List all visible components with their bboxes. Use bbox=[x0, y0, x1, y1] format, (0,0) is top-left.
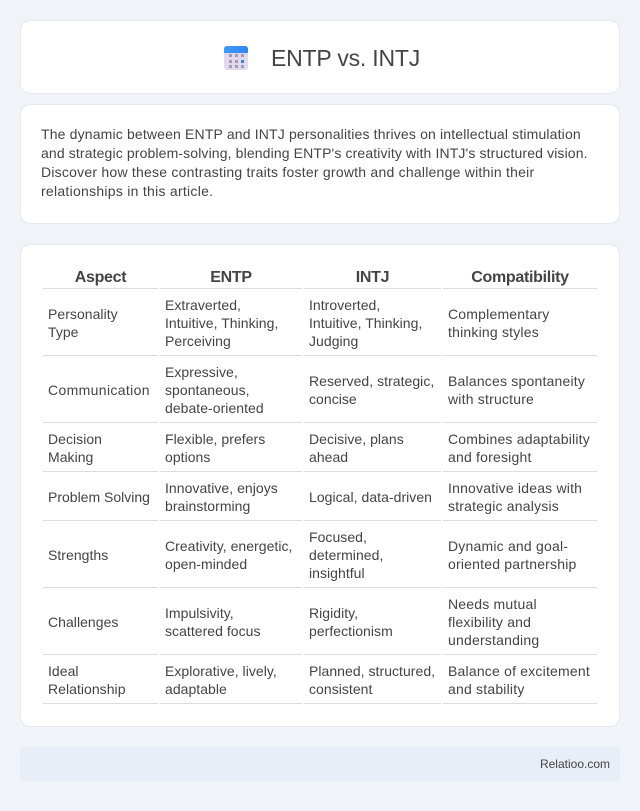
row: Strengths: determined, bbox=[309, 547, 383, 563]
row: Communication: Reserved, strategic, bbox=[309, 373, 434, 389]
row: Ideal Relationship bbox=[43, 663, 597, 704]
row: Decision Making bbox=[43, 431, 597, 472]
row: Communication: debate-oriented bbox=[165, 400, 264, 416]
row: Problem Solving bbox=[43, 480, 597, 521]
row: Communication: concise bbox=[309, 391, 357, 407]
intro text bbox=[41, 126, 588, 199]
icon: calendar bbox=[224, 46, 248, 70]
row: Personality Type: Complementary bbox=[448, 306, 549, 322]
intro card bbox=[20, 104, 620, 224]
row: Personality Type: Judging bbox=[309, 333, 358, 349]
table header bbox=[43, 269, 597, 289]
row: Challenges: scattered focus bbox=[165, 623, 261, 639]
row: Decision Making: options bbox=[165, 449, 210, 465]
row: Strengths: Creativity, energetic, bbox=[165, 538, 292, 554]
row: Personality Type: Type bbox=[48, 324, 79, 340]
row: Ideal Relationship: Planned, structured, bbox=[309, 663, 435, 679]
row: Personality Type bbox=[43, 297, 597, 356]
row: Communication: with structure bbox=[448, 391, 534, 407]
row: Challenges: flexibility and bbox=[448, 614, 531, 630]
row: Strengths: oriented partnership bbox=[448, 556, 577, 572]
row: Challenges: perfectionism bbox=[309, 623, 393, 639]
row: Decision Making: and foresight bbox=[448, 449, 532, 465]
row: Problem Solving: Problem Solving bbox=[48, 489, 150, 505]
row: Challenges: Rigidity, bbox=[309, 605, 358, 621]
row: Ideal Relationship: Explorative, lively, bbox=[165, 663, 277, 679]
table header: Compatibility bbox=[471, 269, 569, 286]
row: Strengths: Strengths bbox=[48, 547, 108, 563]
row: Challenges bbox=[43, 596, 597, 655]
row: Decision Making: Decisive, plans bbox=[309, 431, 404, 447]
row: Challenges: Needs mutual bbox=[448, 596, 537, 612]
row: Decision Making: ahead bbox=[309, 449, 348, 465]
row: Challenges: Impulsivity, bbox=[165, 605, 234, 621]
row: Decision Making: Combines adaptability bbox=[448, 431, 590, 447]
row: Decision Making: Making bbox=[48, 449, 93, 465]
row: Ideal Relationship: and stability bbox=[448, 681, 525, 697]
row: Strengths: insightful bbox=[309, 565, 365, 581]
row: Personality Type: Intuitive, Thinking, bbox=[309, 315, 422, 331]
row: Personality Type: thinking styles bbox=[448, 324, 539, 340]
title: ENTP vs. INTJ bbox=[271, 45, 420, 71]
row: Personality Type: Introverted, bbox=[309, 297, 380, 313]
row: Personality Type: Personality bbox=[48, 306, 118, 322]
row: Communication: Expressive, bbox=[165, 364, 238, 380]
table header: Aspect bbox=[75, 269, 126, 286]
table header: ENTP bbox=[210, 269, 252, 286]
row: Challenges: Challenges bbox=[48, 614, 118, 630]
intro text: Discover how these contrasting traits foster growth and challenge within their bbox=[41, 164, 534, 180]
footer bar bbox=[20, 747, 620, 781]
row: Communication: Communication bbox=[48, 382, 150, 398]
row: Decision Making: Flexible, prefers bbox=[165, 431, 265, 447]
row: Problem Solving: brainstorming bbox=[165, 498, 250, 514]
table header: INTJ bbox=[356, 269, 389, 286]
row: Strengths bbox=[43, 529, 597, 588]
row: Communication: spontaneous, bbox=[165, 382, 250, 398]
row: Problem Solving: Logical, data-driven bbox=[309, 489, 432, 505]
row: Strengths: Dynamic and goal- bbox=[448, 538, 568, 554]
table bbox=[43, 269, 597, 704]
row: Problem Solving: Innovative ideas with bbox=[448, 480, 582, 496]
row: Personality Type: Intuitive, Thinking, bbox=[165, 315, 278, 331]
footer text: Relatioo.com bbox=[540, 757, 610, 771]
row: Strengths: open-minded bbox=[165, 556, 247, 572]
intro text: and strategic problem-solving, blending ENTP's creativity with INTJ's structured vision. bbox=[41, 145, 588, 161]
row: Problem Solving: Innovative, enjoys bbox=[165, 480, 278, 496]
row: Challenges: understanding bbox=[448, 632, 539, 648]
intro text: The dynamic between ENTP and INTJ personalities thrives on intellectual stimulation bbox=[41, 126, 581, 142]
row: Personality Type: Perceiving bbox=[165, 333, 231, 349]
row: Ideal Relationship: Relationship bbox=[48, 681, 126, 697]
row: Decision Making: Decision bbox=[48, 431, 102, 447]
row: Communication: Balances spontaneity bbox=[448, 373, 585, 389]
header card bbox=[20, 20, 620, 94]
row: Ideal Relationship: Balance of excitement bbox=[448, 663, 590, 679]
row: Ideal Relationship: consistent bbox=[309, 681, 372, 697]
row: Problem Solving: strategic analysis bbox=[448, 498, 559, 514]
row: Strengths: Focused, bbox=[309, 529, 367, 545]
row: Communication bbox=[43, 364, 597, 423]
row: Personality Type: Extraverted, bbox=[165, 297, 241, 313]
row: Ideal Relationship: adaptable bbox=[165, 681, 227, 697]
intro text: relationships in this article. bbox=[41, 183, 213, 199]
table card bbox=[20, 244, 620, 727]
row: Ideal Relationship: Ideal bbox=[48, 663, 79, 679]
